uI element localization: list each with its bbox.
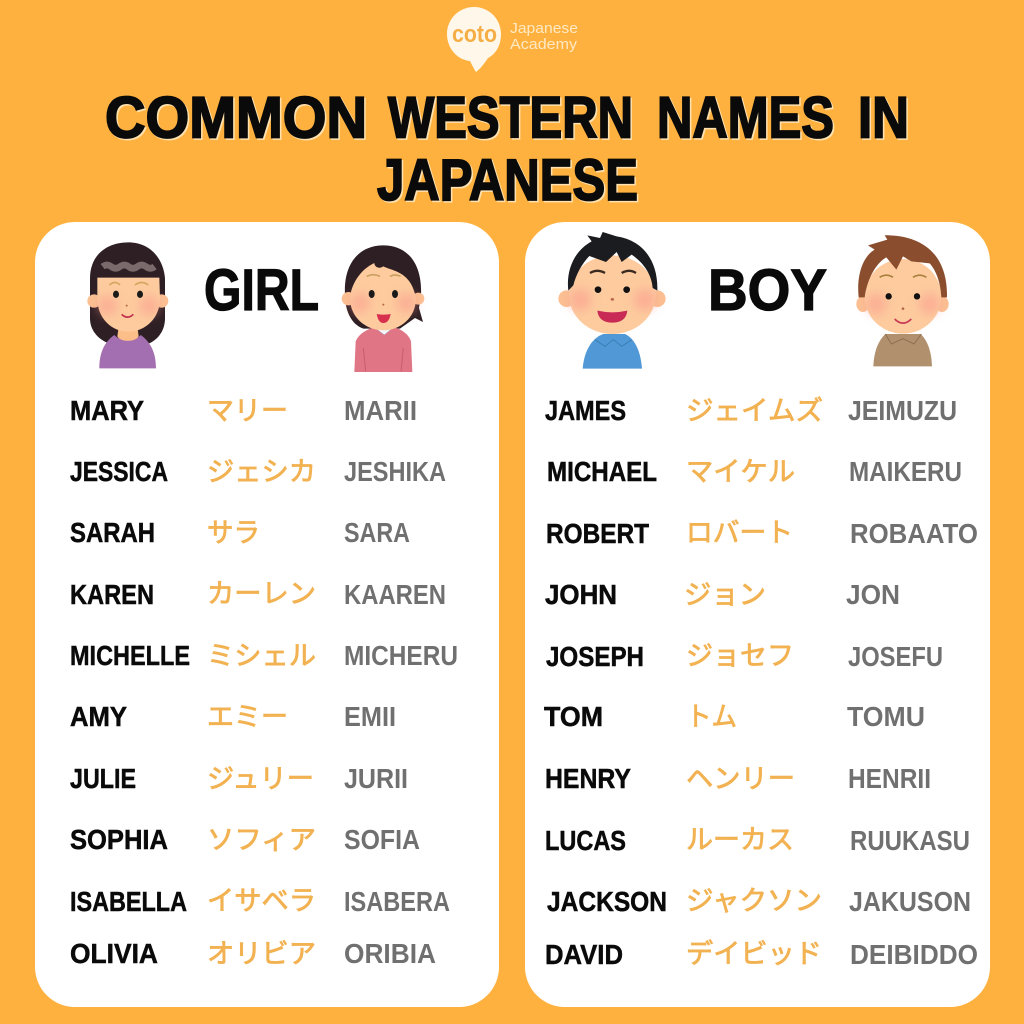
heading: BOY: BOY	[708, 258, 827, 323]
boy name rows: HENRII	[848, 763, 931, 794]
title: COMMON	[106, 87, 368, 152]
boy name rows: TOM	[544, 701, 603, 732]
boy name rows: ルーカス	[686, 825, 794, 855]
girl name rows: マリー	[207, 396, 288, 426]
girl name rows: KAAREN	[344, 579, 446, 610]
boy name rows: ROBAATO	[850, 518, 978, 549]
boy name rows: ヘンリー	[686, 764, 795, 794]
title: JAPANESE	[378, 150, 640, 214]
boy name rows: ジョン	[684, 580, 766, 610]
panel: girl names	[35, 222, 499, 1007]
logo: coto Japanese Academy	[447, 7, 578, 72]
panel: boy names	[525, 222, 990, 1007]
girl name rows: SOPHIA	[70, 824, 168, 855]
girl name rows: ソフィア	[207, 825, 316, 855]
girl name rows: ISABELLA	[70, 886, 187, 917]
icon: boy with tan sweater	[856, 235, 949, 366]
girl name rows: KAREN	[70, 579, 154, 610]
girl name rows: MARY	[70, 395, 144, 426]
boy name rows: ジョセフ	[686, 641, 794, 671]
girl name rows: イサベラ	[207, 886, 316, 916]
girl name rows	[70, 395, 458, 969]
girl name rows: OLIVIA	[70, 938, 158, 969]
boy name rows: JACKSON	[547, 886, 667, 917]
girl name rows: SARA	[344, 517, 410, 548]
boy name rows: トム	[686, 702, 737, 732]
girl name rows: MICHERU	[344, 640, 458, 671]
boy name rows: JON	[846, 579, 900, 610]
title: WESTERN	[390, 87, 634, 152]
boy name rows: HENRY	[545, 763, 631, 794]
boy name rows: MICHAEL	[547, 456, 657, 487]
boy name rows	[544, 395, 978, 970]
boy name rows: JOHN	[545, 579, 617, 610]
girl name rows: JESSICA	[70, 456, 168, 487]
title: NAMES	[658, 87, 836, 152]
boy name rows: ROBERT	[546, 518, 649, 549]
girl name rows: エミー	[207, 702, 288, 732]
girl name rows: ジェシカ	[207, 457, 316, 487]
girl name rows: ISABERA	[344, 886, 450, 917]
boy name rows: JOSEPH	[546, 641, 644, 672]
girl name rows: SOFIA	[344, 824, 420, 855]
icon: girl with purple top	[87, 242, 168, 368]
girl name rows: JURII	[344, 763, 408, 794]
girl name rows: EMII	[344, 701, 396, 732]
title	[105, 86, 910, 214]
girl name rows: JULIE	[70, 763, 136, 794]
title: WESTERN	[388, 86, 633, 150]
boy name rows: JAKUSON	[849, 886, 971, 917]
girl name rows: SARAH	[70, 517, 155, 548]
title: NAMES	[657, 86, 834, 150]
girl name rows: オリビア	[207, 939, 316, 969]
boy name rows: TOMU	[847, 701, 925, 732]
logo: coto Japanese Academy: coto	[452, 21, 497, 48]
boy name rows: JOSEFU	[848, 641, 943, 672]
boy name rows: デイビッド	[686, 939, 822, 969]
boy name rows: DEIBIDDO	[850, 939, 978, 970]
boy name rows: JEIMUZU	[848, 395, 957, 426]
logo: coto Japanese Academy: Japanese	[510, 20, 578, 37]
boy name rows: LUCAS	[545, 825, 626, 856]
girl name rows: ジュリー	[207, 764, 314, 794]
boy name rows: マイケル	[686, 457, 795, 487]
boy name rows: ジェイムズ	[686, 396, 823, 426]
girl name rows: JESHIKA	[344, 456, 446, 487]
girl name rows: AMY	[70, 701, 127, 732]
girl name rows: MARII	[344, 395, 417, 426]
girl name rows: サラ	[207, 518, 260, 548]
girl name rows: カーレン	[207, 579, 316, 609]
icon: girl with pink sweater	[342, 245, 424, 372]
title: JAPANESE	[377, 148, 638, 213]
icon: boy with blue sweater	[558, 232, 666, 369]
boy name rows: RUUKASU	[850, 825, 970, 856]
girl name rows: MICHELLE	[70, 640, 190, 671]
boy name rows: DAVID	[545, 939, 623, 970]
title: IN	[858, 86, 909, 150]
title: COMMON	[105, 86, 367, 150]
title: IN	[860, 87, 910, 152]
boy name rows: ジャクソン	[686, 886, 822, 916]
girl name rows: ミシェル	[207, 641, 316, 671]
boy name rows: ロバート	[686, 518, 793, 548]
girl name rows: ORIBIA	[344, 938, 436, 969]
boy name rows: JAMES	[545, 395, 626, 426]
logo: coto Japanese Academy: Academy	[510, 36, 578, 53]
boy name rows: MAIKERU	[849, 456, 962, 487]
heading: GIRL: GIRL	[204, 258, 319, 323]
